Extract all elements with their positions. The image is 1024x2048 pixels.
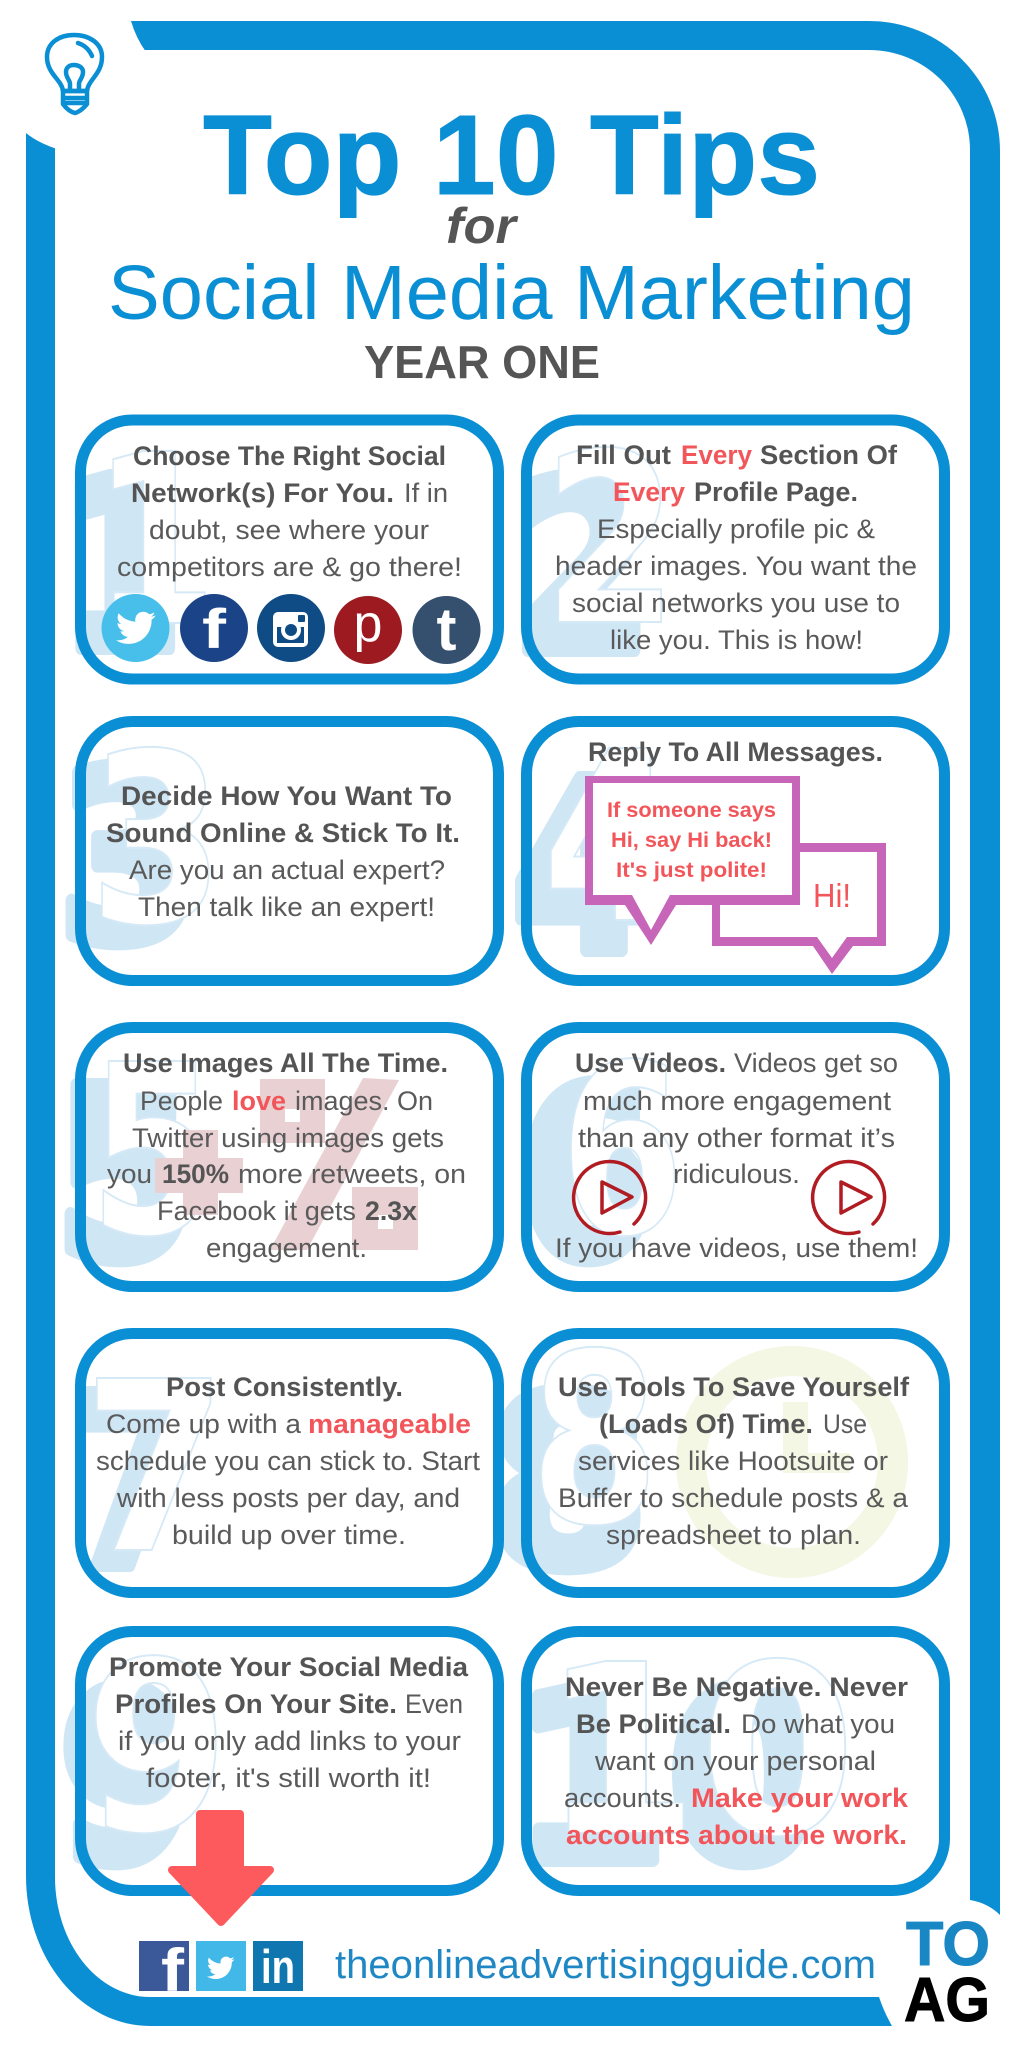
background numerals: 5 — [89, 1014, 218, 1289]
tip 5 text: images. On — [295, 1086, 433, 1116]
tip 10 text: Make your work — [691, 1783, 908, 1813]
speech bubble: Hi reply — [712, 843, 886, 974]
icon: pinterest circle — [334, 595, 402, 664]
background numerals: 6 — [518, 1038, 654, 1313]
icon: pinterest circle: p — [354, 595, 382, 653]
background numerals: 9 — [85, 1611, 229, 1886]
icon: tumblr circle: t — [437, 596, 457, 663]
panel: tip 4 — [526, 722, 944, 980]
title: Social Media Marketing — [108, 250, 915, 336]
tip 7 text: schedule you can stick to. Start — [96, 1446, 481, 1476]
tip 5 text — [107, 1048, 466, 1263]
icon: play button left — [574, 1162, 646, 1234]
background numerals: 10 — [542, 1614, 856, 1889]
tip 6 text: much more engagement — [583, 1086, 892, 1116]
panel: tip 9 — [80, 1632, 498, 1890]
tip 5 text: Facebook it gets — [157, 1196, 356, 1226]
tip 10 text: accounts. — [564, 1783, 681, 1813]
TOAG logo — [904, 1910, 990, 2035]
background numerals: 3 — [89, 703, 224, 978]
icon: play button right — [813, 1162, 885, 1234]
tip 8 text: (Loads Of) Time. — [599, 1409, 813, 1439]
tip 10 text — [564, 1672, 908, 1850]
tip 5 text: Twitter using images gets — [132, 1123, 444, 1153]
tip 6 text: ridiculous. — [673, 1159, 800, 1189]
panel: tip 7 — [80, 1334, 498, 1592]
tip 7 text: build up over time. — [172, 1520, 406, 1550]
tip 7 text: with less posts per day, and — [116, 1483, 460, 1513]
speech bubble: advice: If someone says — [607, 798, 776, 822]
tip 5 text: People — [140, 1086, 223, 1116]
background numerals: 7 — [83, 1331, 227, 1606]
tip 9 text: Promote Your Social Media — [109, 1652, 468, 1682]
tip 2 text: Especially profile pic & — [597, 514, 875, 544]
TOAG logo: AG — [904, 1966, 990, 2035]
speech bubble: advice: It's just polite! — [616, 858, 767, 882]
tip 9 text — [109, 1652, 468, 1793]
icon: light bulb — [47, 35, 102, 113]
clock graphic — [691, 1361, 893, 1563]
tip 1 text: competitors are & go there! — [117, 552, 462, 582]
background numerals: 8 — [488, 1346, 648, 1621]
tip 9 text: Profiles On Your Site. — [115, 1689, 397, 1719]
tip 10 text: Never Be Negative. Never — [565, 1672, 908, 1702]
tip 8 text: services like Hootsuite or — [578, 1446, 888, 1476]
tip 7 text — [96, 1372, 481, 1550]
background numerals: 1 — [60, 429, 182, 704]
tip 6 text — [555, 1048, 918, 1263]
tip 3 text — [106, 781, 460, 922]
tip 2 text: Fill Out — [576, 440, 671, 470]
tip 9 text: Even — [405, 1689, 463, 1719]
icon: facebook circle: f — [202, 597, 226, 660]
tip 8 text: spreadsheet to plan. — [606, 1520, 861, 1550]
background numerals: 3 — [58, 721, 200, 996]
icon: facebook square — [139, 1937, 189, 2004]
tip 9 text: if you only add links to your — [118, 1726, 461, 1756]
tip 7 text: manageable — [308, 1409, 471, 1439]
background numerals: 1 — [93, 404, 217, 679]
tip 2 text: header images. You want the — [555, 551, 917, 581]
tip 1 text: doubt, see where your — [149, 515, 429, 545]
tip 5 text: Use Images All The Time. — [123, 1048, 448, 1078]
title — [108, 92, 915, 388]
tip 7 text: Come up with a — [106, 1409, 301, 1439]
panel: tip 1 — [80, 420, 498, 679]
tip 2 text — [555, 440, 917, 655]
tip 2 text: social networks you use to — [572, 588, 900, 618]
panel: tip 5 — [80, 1028, 498, 1286]
tip 6 text: Use Videos. — [575, 1048, 726, 1078]
plus percent graphic — [155, 1078, 418, 1250]
tip 5 text: engagement. — [206, 1233, 367, 1263]
background numerals: 10 — [513, 1641, 823, 1916]
tip 10 text: accounts about the work. — [566, 1820, 907, 1850]
panel: tip 8 — [526, 1334, 944, 1592]
website url: theonlineadvertisingguide.com — [335, 1943, 876, 1987]
tip 10 text: Be Political. — [576, 1709, 731, 1739]
tip 2 text: Every — [613, 477, 685, 507]
background numerals — [55, 403, 856, 1916]
tip 6 text: than any other format it’s — [578, 1123, 895, 1153]
tip 8 text — [558, 1372, 909, 1550]
background numerals: 2 — [543, 403, 678, 678]
icon: twitter circle — [102, 594, 170, 662]
icon: facebook square: f — [161, 1937, 185, 2004]
background numerals: 2 — [512, 431, 652, 706]
tip 10 text: Do what you — [741, 1709, 895, 1739]
icon: twitter square — [196, 1941, 246, 1991]
tip 2 text: like you. This is how! — [610, 625, 863, 655]
title: YEAR ONE — [364, 336, 600, 388]
icon: facebook circle — [180, 594, 248, 662]
panel: tip 6 — [526, 1028, 944, 1286]
footer social icons — [139, 1937, 303, 2004]
tip 5 text: more retweets, on — [238, 1159, 466, 1189]
background numerals: 6 — [560, 1014, 684, 1289]
tip 4 heading: Reply To All Messages. — [588, 737, 883, 767]
tip 5 text: 2.3x — [365, 1196, 417, 1226]
tip 6 text: Videos get so — [734, 1048, 898, 1078]
tip 5 text: 150% — [162, 1159, 229, 1189]
tip 8 text: Use Tools To Save Yourself — [558, 1372, 909, 1402]
TOAG logo: TO — [906, 1910, 990, 1979]
background numerals: 8 — [530, 1303, 659, 1578]
speech bubble: Hi reply: Hi! — [813, 877, 851, 914]
tip 8 text: Buffer to schedule posts & a — [558, 1483, 908, 1513]
icon: tumblr circle — [412, 596, 480, 664]
panel: tip 2 — [526, 420, 944, 679]
tip 2 text: Every — [681, 440, 752, 470]
background numerals: 7 — [68, 1346, 198, 1621]
tip 3 text: Sound Online & Stick To It. — [106, 818, 460, 848]
tip 8 text: Use — [823, 1409, 867, 1439]
tip 2 text: Section Of — [760, 440, 897, 470]
tip 10 text: want on your personal — [594, 1746, 876, 1776]
background numerals: 4 — [512, 731, 652, 1006]
tip 6 text: If you have videos, use them! — [555, 1233, 918, 1263]
title: for — [446, 198, 519, 254]
arrow: down to social links — [172, 1814, 270, 1922]
tip 1 text: Choose The Right Social — [133, 441, 446, 471]
tip 7 text: Post Consistently. — [166, 1372, 403, 1402]
tip 1 text — [117, 441, 462, 582]
tip 3 text: Are you an actual expert? — [129, 855, 445, 885]
background numerals: 4 — [542, 701, 680, 976]
speech bubble: advice — [585, 776, 800, 945]
tip 5 text: you — [107, 1159, 152, 1189]
icon: linkedin square: in — [261, 1940, 295, 1993]
tip 3 text: Then talk like an expert! — [138, 892, 435, 922]
tip 1 text: Network(s) For You. — [131, 478, 394, 508]
tip 1 text: If in — [404, 478, 448, 508]
background numerals: 5 — [55, 1038, 195, 1313]
speech bubble: advice: Hi, say Hi back! — [611, 828, 772, 852]
tip 9 text: footer, it's still worth it! — [146, 1763, 431, 1793]
tip 5 text: love — [232, 1086, 286, 1116]
panel: tip 10 — [526, 1632, 944, 1890]
panel: tip 3 — [80, 722, 498, 980]
background numerals: 9 — [59, 1641, 196, 1916]
icon: instagram circle — [257, 594, 325, 662]
tip 3 text: Decide How You Want To — [121, 781, 452, 811]
tip 2 text: Profile Page. — [694, 477, 858, 507]
title: Top 10 Tips — [203, 92, 820, 218]
